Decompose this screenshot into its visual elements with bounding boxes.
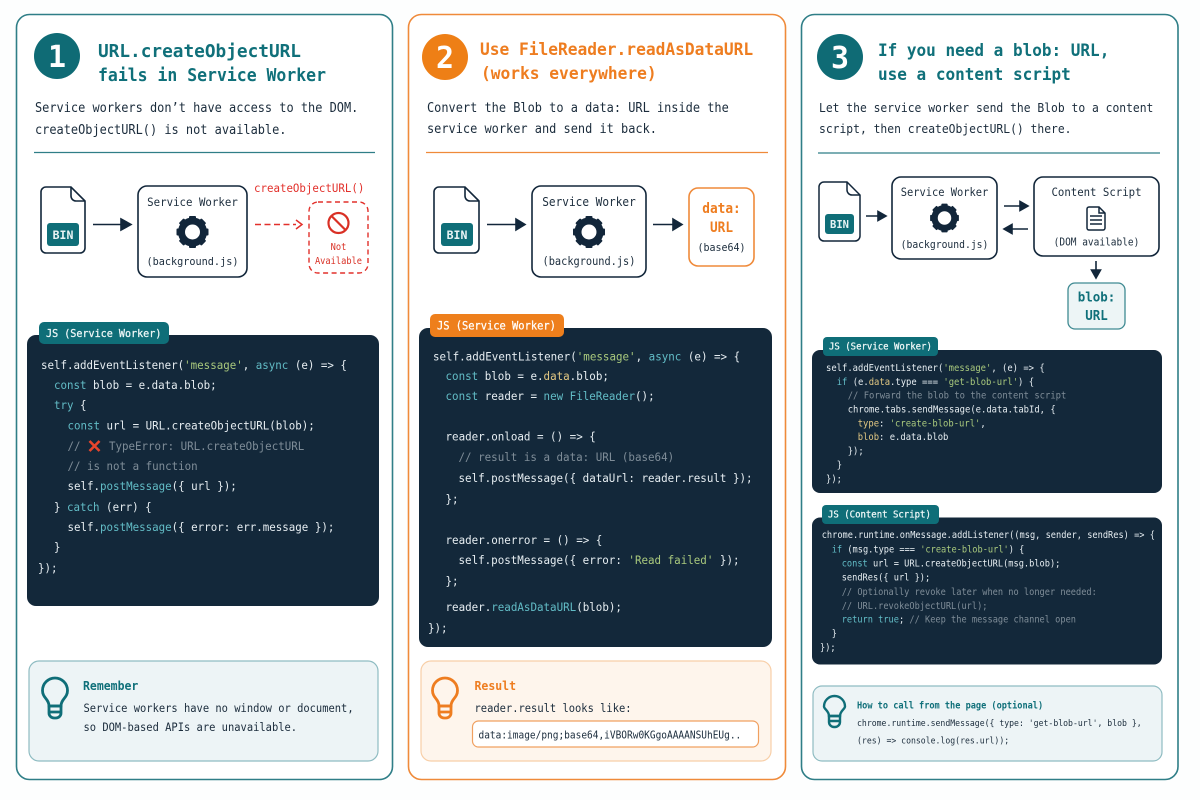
heading: step 1: [98, 42, 326, 86]
code block: step 2 service worker: reader.onload = () => {: [446, 430, 596, 444]
code block: step 2 service worker: // result is a data: URL (base64): [459, 451, 674, 464]
arrow: service worker to data URL: [653, 219, 682, 230]
code block: step 3 content script: [812, 505, 1162, 664]
code block: step 2 service worker: const blob = e.data.blob;: [446, 370, 609, 383]
arrow: file to service worker: [866, 212, 886, 220]
icon: BIN file: [41, 187, 85, 253]
text: step 1 intro: Service workers don’t have access to the DOM.: [35, 100, 358, 115]
diagram: service worker cannot create URL: [41, 182, 368, 277]
box: data URL: data:: [702, 202, 741, 217]
code block: step 2 service worker: };: [446, 493, 459, 506]
code block: step 1 service worker: self.postMessage({ url });: [68, 480, 237, 493]
step number 1: 1: [48, 40, 66, 75]
text: step 3 intro: [819, 101, 1153, 136]
callout: how to call from the page: (res) => console.log(res.url));: [857, 736, 1009, 747]
box: blob URL: URL: [1085, 309, 1108, 324]
box: service worker: [138, 186, 247, 277]
heading: step 2: (works everywhere): [481, 64, 657, 83]
box: service worker: [532, 186, 646, 277]
callout: result: reader.result looks like:: [475, 702, 632, 715]
code block: step 2 service worker: self.postMessage({ error: 'Read failed' });: [459, 554, 740, 567]
tag: JS service worker: JS (Service Worker): [46, 328, 161, 340]
code block: step 1 service worker: });: [38, 562, 58, 575]
step number 3: [817, 34, 863, 80]
code block: step 3 content script: }: [832, 629, 837, 640]
label: createObjectURL: createObjectURL(): [254, 182, 364, 195]
code block: step 3 service worker: type: 'create-blob-url',: [858, 418, 986, 430]
code block: step 1 service worker: } catch (err) {: [54, 501, 152, 514]
icon: BIN file: BIN: [830, 219, 849, 231]
tag: JS service worker: [823, 337, 938, 356]
icon: red cross: [90, 441, 100, 451]
code block: step 3 service worker: });: [848, 446, 864, 457]
callout: result: [421, 661, 771, 761]
callout: result: Result: [475, 679, 516, 693]
code block: step 2 service worker: const reader = new FileReader();: [446, 390, 655, 403]
code block: step 3 service worker: [812, 337, 1162, 493]
callout: remember: Remember: [83, 679, 138, 693]
text: step 1 intro: [35, 100, 358, 137]
heading: step 1: URL.createObjectURL: [98, 42, 301, 62]
box: service worker: Service Worker: [147, 196, 238, 209]
text: step 3 intro: Let the service worker send the Blob to a content: [819, 101, 1153, 115]
box: service worker: (background.js): [543, 255, 635, 268]
box: not available: Available: [315, 257, 362, 267]
data URL sample: [472, 721, 758, 747]
panel: step 2, FileReader: [408, 14, 786, 780]
code block: step 2 service worker: [419, 314, 772, 647]
text: step 3 intro: script, then createObjectURL() there.: [819, 122, 1072, 136]
code block: step 3 content script: });: [820, 643, 836, 654]
callout: how to call from the page: [813, 686, 1162, 761]
text: step 2 intro: Convert the Blob to a data: URL inside the: [427, 100, 729, 115]
box: content script: (DOM available): [1054, 237, 1139, 249]
box: not available: [309, 202, 368, 273]
box: service worker: Service Worker: [542, 195, 636, 209]
step number 3: 3: [831, 41, 849, 76]
box: blob URL: blob:: [1078, 290, 1115, 306]
step number 1: [34, 33, 80, 79]
tag: JS content script: [822, 505, 939, 524]
code block: step 1 service worker: [27, 322, 379, 606]
code block: step 1 service worker: self.postMessage({ error: err.message });: [68, 521, 334, 534]
icon: BIN file: [819, 182, 860, 241]
code block: step 3 content script: // URL.revokeObjectURL(url);: [842, 602, 987, 612]
code block: step 1 service worker: TypeError: URL.createObjectURL: [109, 440, 304, 453]
arrows: messages between workers: [1004, 202, 1028, 234]
callout: remember: [29, 661, 378, 761]
heading: step 2: [480, 40, 753, 83]
code block: step 1 service worker: const blob = e.data.blob;: [54, 379, 217, 392]
icon: light bulb: [432, 678, 458, 718]
code block: step 3 content script: // Optionally revoke later when no longer needed:: [842, 588, 1097, 598]
heading: step 2: Use FileReader.readAsDataURL: [480, 40, 753, 59]
tag: JS content script: JS (Content Script): [828, 509, 931, 521]
box: blob URL: [1068, 283, 1125, 329]
code block: step 3 content script: sendRes({ url });: [842, 573, 930, 584]
box: service worker: (background.js): [147, 256, 238, 268]
code block: step 2 service worker: self.addEventListener('message', async (e) => {: [433, 350, 740, 364]
tag: JS service worker: [39, 322, 169, 344]
code block: step 3 service worker: chrome.tabs.sendMessage(e.data.tabId, {: [848, 404, 1056, 416]
box: data URL: [689, 188, 754, 266]
panel: step 3, content script: [802, 14, 1178, 780]
code block: step 3 content script: chrome.runtime.onMessage.addListener((msg, sender, sendRes) => {: [822, 531, 1155, 541]
icon: BIN file: [434, 187, 479, 253]
code block: step 3 service worker: // Forward the blob to the content script: [848, 390, 1066, 402]
callout: how to call from the page: How to call from the page (optional): [857, 700, 1043, 712]
code block: step 3 content script: return true; // Keep the message channel open: [842, 615, 1076, 626]
icon: light bulb: [824, 696, 845, 727]
box: service worker: [892, 177, 997, 259]
box: data URL: URL: [710, 221, 733, 236]
step number 2: [422, 34, 468, 80]
icon: BIN file: BIN: [447, 228, 467, 242]
code block: step 2 service worker: self.postMessage({ dataUrl: reader.result });: [459, 472, 753, 485]
code block: step 1 service worker: try {: [54, 399, 87, 412]
box: content script: Content Script: [1051, 186, 1142, 199]
icon: document: [1087, 207, 1105, 230]
code block: step 3 service worker: blob: e.data.blob: [858, 432, 948, 443]
arrow: file to service worker: [93, 219, 131, 230]
tag: JS service worker: JS (Service Worker): [829, 341, 932, 353]
code block: step 2 service worker: reader.onerror = () => {: [446, 534, 602, 547]
code block: step 3 content script: if (msg.type === 'create-blob-url') {: [832, 545, 1024, 555]
code block: step 3 service worker: self.addEventListener('message', (e) => {: [826, 363, 1045, 374]
code block: step 1 service worker: const url = URL.createObjectURL(blob);: [68, 419, 315, 433]
tag: JS service worker: JS (Service Worker): [437, 319, 556, 333]
tag: JS service worker: [430, 314, 564, 337]
icon: BIN file: BIN: [53, 228, 73, 242]
box: data URL: (base64): [697, 242, 746, 254]
heading: step 3: [878, 41, 1109, 84]
callout: how to call from the page: chrome.runtime.sendMessage({ type: 'get-blob-url', blob },: [857, 719, 1142, 729]
diagram: service worker and content script: [819, 177, 1159, 329]
arrow: content script to blob URL: [1092, 261, 1100, 278]
text: step 1 intro: createObjectURL() is not available.: [35, 122, 287, 137]
box: not available: Not: [331, 243, 346, 253]
icon: light bulb: [42, 678, 68, 718]
box: content script: [1034, 177, 1159, 256]
code block: step 2 service worker: reader.readAsDataURL(blob);: [446, 601, 622, 614]
callout: remember: so DOM-based APIs are unavailable.: [84, 721, 297, 734]
heading: step 1: fails in Service Worker: [98, 66, 326, 86]
heading: step 3: If you need a blob: URL,: [878, 41, 1109, 60]
code block: step 2 service worker: };: [446, 575, 459, 588]
code block: step 3 content script: const url = URL.createObjectURL(msg.blob);: [842, 559, 1060, 570]
data URL sample: data:image/png;base64,iVBORw0KGgoAAAANSUhEUg..: [479, 730, 741, 742]
panel: step 1, createObjectURL fails: [16, 14, 392, 780]
arrow: dashed failing call: [255, 220, 302, 229]
code block: step 3 service worker: }: [837, 460, 842, 471]
text: step 2 intro: [427, 100, 729, 136]
code block: step 3 service worker: if (e.data.type === 'get-blob-url') {: [837, 377, 1034, 388]
box: service worker: (background.js): [901, 240, 988, 251]
code block: step 1 service worker: }: [54, 541, 61, 554]
code block: step 1 service worker: //: [68, 440, 81, 453]
box: service worker: Service Worker: [901, 186, 989, 199]
step number 2: 2: [436, 41, 454, 76]
code block: step 1 service worker: // is not a function: [68, 460, 198, 473]
code block: step 1 service worker: self.addEventListener('message', async (e) => {: [41, 359, 347, 372]
code block: step 3 service worker: });: [826, 474, 842, 485]
diagram: blob to data URL: [434, 186, 754, 277]
arrow: file to service worker: [487, 219, 525, 230]
heading: step 3: use a content script: [878, 65, 1071, 84]
code block: step 2 service worker: });: [428, 622, 448, 635]
text: step 2 intro: service worker and send it back.: [427, 121, 657, 136]
callout: remember: Service workers have no window or document,: [84, 702, 354, 715]
